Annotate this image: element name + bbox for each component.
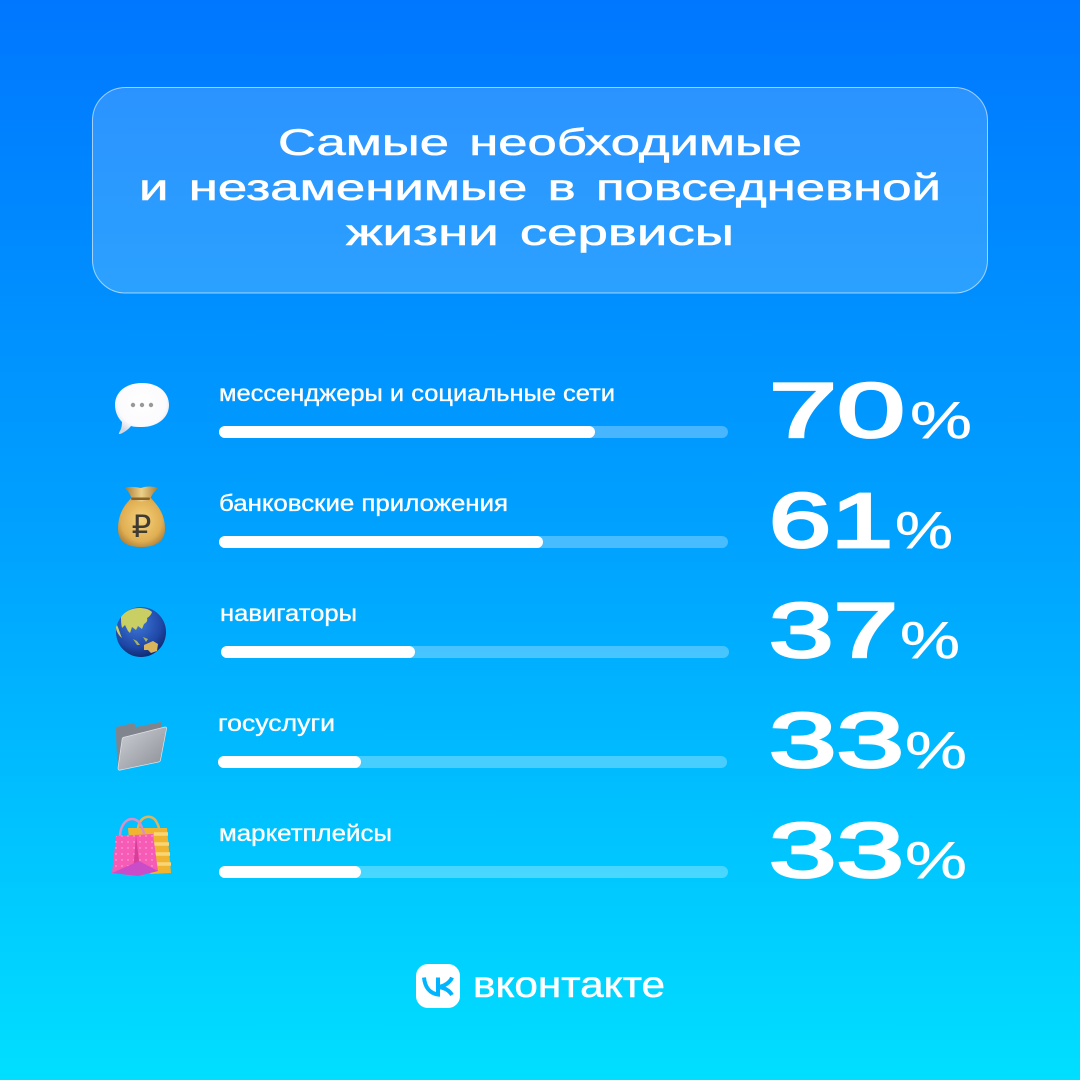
value: % bbox=[895, 502, 953, 560]
value bbox=[769, 698, 967, 784]
row: public services bbox=[116, 698, 967, 784]
progress bar bbox=[219, 426, 728, 438]
label: банковские приложения bbox=[219, 490, 508, 516]
row: banking apps bbox=[118, 478, 953, 564]
title: жизни сервисы bbox=[346, 212, 734, 253]
row: marketplaces bbox=[112, 808, 967, 894]
value: % bbox=[900, 612, 960, 670]
value: 33 bbox=[769, 698, 904, 784]
title: Самые необходимые bbox=[278, 122, 802, 163]
icon: speech bubble bbox=[115, 383, 169, 434]
value: % bbox=[905, 832, 967, 890]
icon: globe bbox=[116, 607, 166, 657]
value bbox=[769, 478, 953, 564]
icon: money bag bbox=[118, 486, 165, 547]
progress bar bbox=[221, 646, 729, 658]
icon: folder bbox=[116, 722, 167, 770]
icon: VK mark bbox=[416, 964, 460, 1008]
value bbox=[769, 588, 960, 674]
label: мессенджеры и социальные сети bbox=[219, 380, 615, 406]
panel: title card bbox=[92, 88, 988, 293]
value bbox=[769, 368, 972, 454]
value: 33 bbox=[769, 808, 904, 894]
title: и незаменимые в повседневной bbox=[139, 167, 941, 208]
value: % bbox=[910, 392, 972, 450]
progress bar bbox=[218, 756, 727, 768]
value: 37 bbox=[769, 588, 898, 674]
icon: money bag: ₽ bbox=[132, 509, 151, 544]
value: % bbox=[905, 722, 967, 780]
title bbox=[139, 122, 941, 253]
row: messengers bbox=[115, 368, 972, 454]
icon: shopping bags bbox=[112, 817, 171, 876]
label: навигаторы bbox=[220, 600, 357, 626]
progress bar bbox=[219, 536, 728, 548]
wordmark: вконтакте bbox=[473, 964, 665, 1005]
logo: VK bbox=[416, 964, 665, 1008]
label: маркетплейсы bbox=[219, 820, 392, 846]
value: 61 bbox=[769, 478, 893, 564]
row: navigators bbox=[116, 588, 960, 674]
value bbox=[769, 808, 967, 894]
value: 70 bbox=[769, 368, 905, 454]
label: госуслуги bbox=[218, 710, 335, 736]
progress bar bbox=[219, 866, 728, 878]
